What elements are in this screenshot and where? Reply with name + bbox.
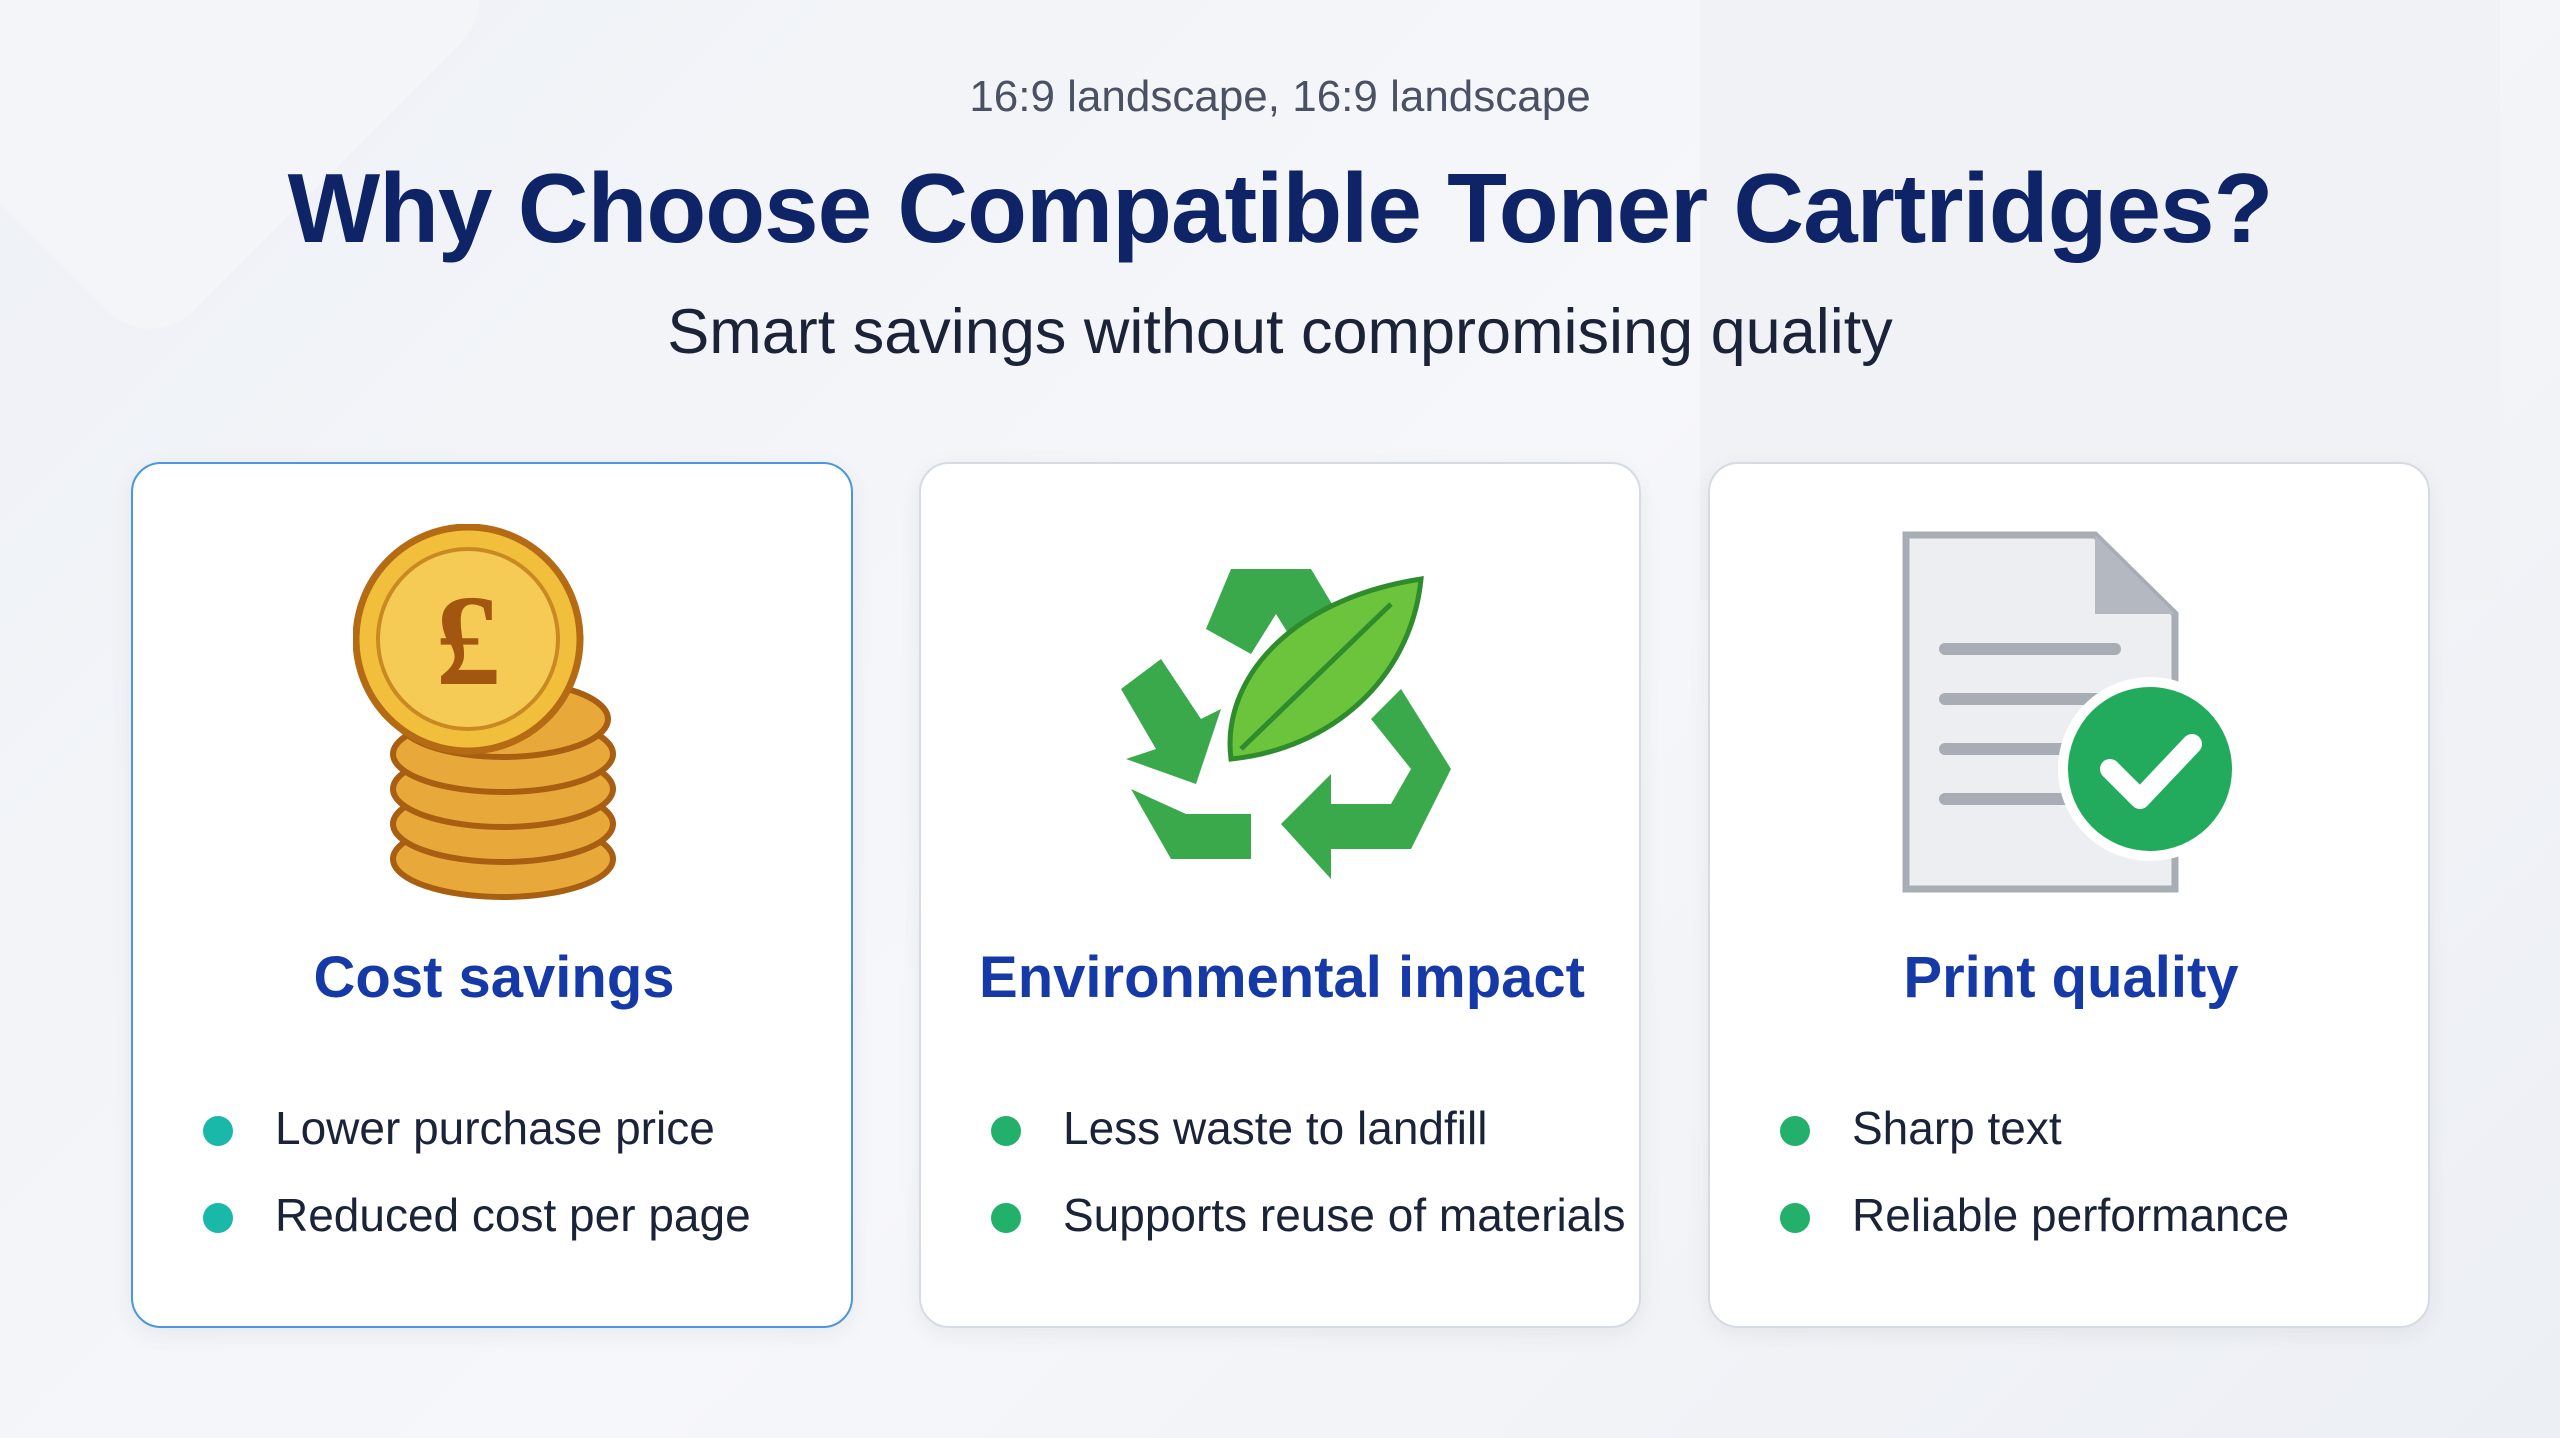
subtitle: Smart savings without compromising quality [667,297,1893,367]
panel: cost savings: Lower purchase price [275,1102,715,1154]
panel: cost savings [131,462,853,1328]
panel: print quality [1708,462,2430,1328]
icon: document with check [1902,532,2232,892]
bullet list [1780,1102,2289,1241]
panel: cost savings: Reduced cost per page [275,1189,751,1241]
panel: print quality: Reliable performance [1852,1189,2289,1241]
title: Why Choose Compatible Toner Cartridges? [288,153,2272,263]
heading: environmental impact: Environmental impact [979,945,1585,1010]
icon: coins [353,524,616,900]
heading: print quality: Print quality [1903,945,2239,1010]
pound sign: £ [436,569,500,713]
bullet list [991,1102,1626,1241]
panel: print quality: Sharp text [1852,1102,2062,1154]
panel: environmental impact: Less waste to landfill [1063,1102,1487,1154]
panel: environmental impact [919,462,1641,1328]
icon: recycle leaf [1121,569,1451,879]
leaf [1230,579,1421,759]
eyebrow text: 16:9 landscape, 16:9 landscape [969,72,1591,121]
bullet list [203,1102,751,1241]
heading: cost savings: Cost savings [314,945,674,1010]
panel: environmental impact: Supports reuse of materials [1063,1189,1626,1241]
